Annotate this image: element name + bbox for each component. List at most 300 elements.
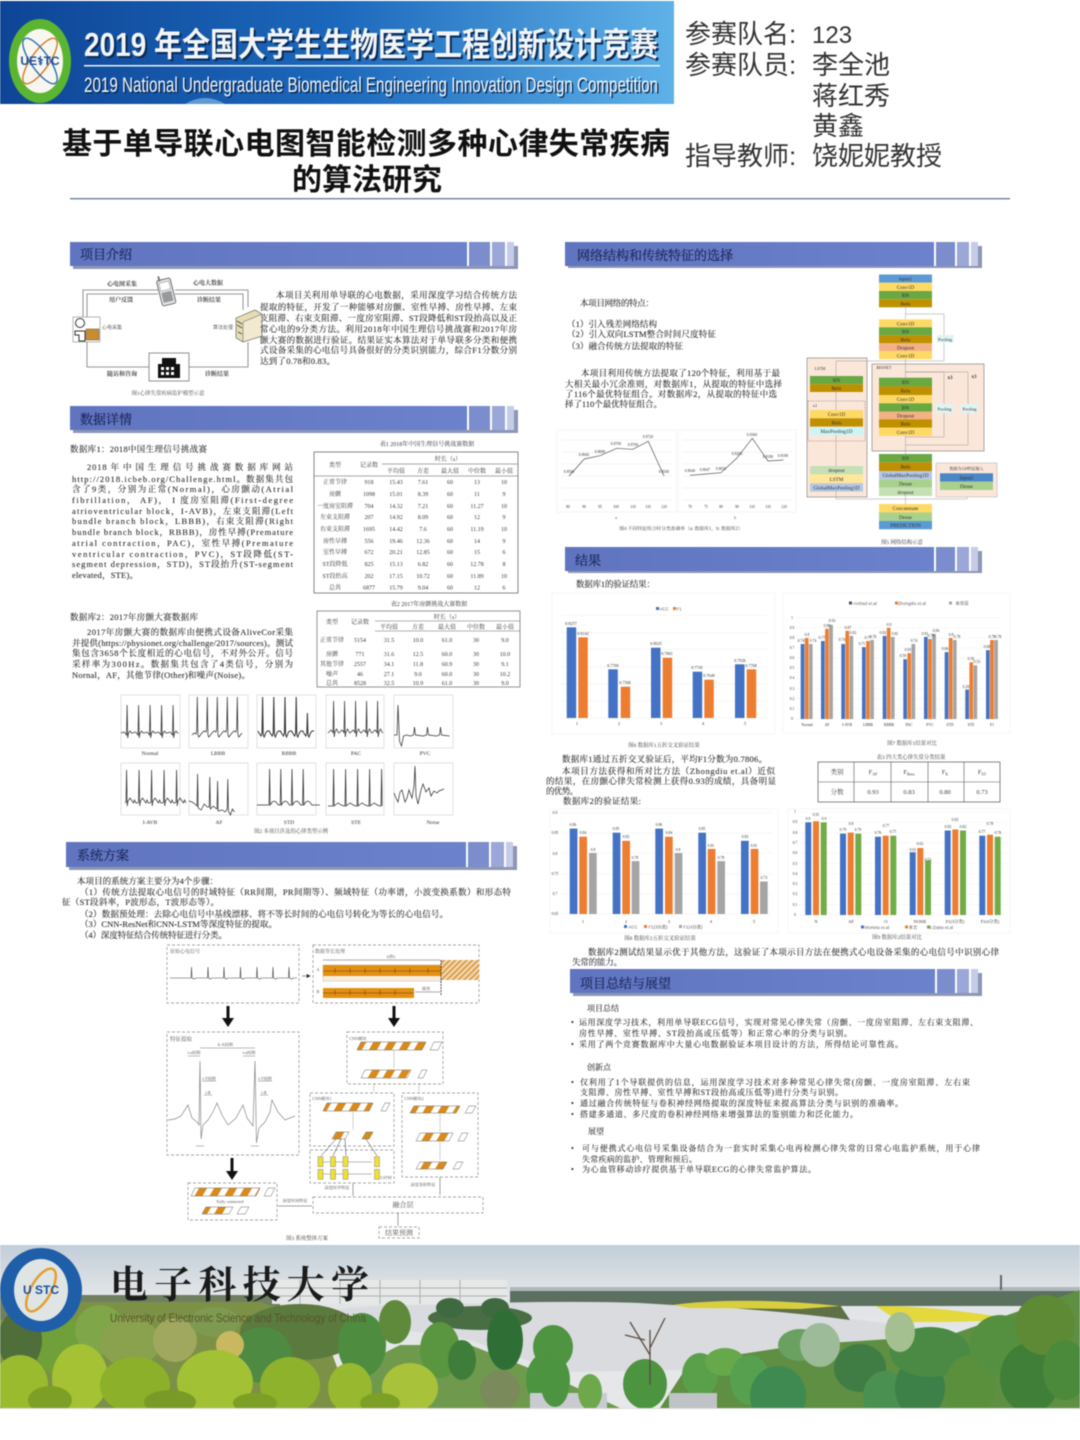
table 2: 31.6 xyxy=(384,652,394,658)
text block: scheme steps: （1）传统方法提取心电信号的时域特征（RR间期，PR间期等）、频域特征（功率谱，小波变换系数）和形态特 xyxy=(80,887,511,898)
text block: outlook: 失常疾病的监护、管理和预后。 xyxy=(582,1154,697,1164)
stack: output block: Dense xyxy=(899,515,913,521)
chart: five-fold validation database 2: ACC xyxy=(628,924,638,930)
stack: second block: Dropout xyxy=(897,346,915,352)
text block: database 1: http://2018.icbeb.org/Challenge.html。数据集共包 xyxy=(72,474,293,484)
chart: feature count accuracy a: 0.8700 xyxy=(628,443,638,447)
chart: five-fold validation database 2: 0.83 xyxy=(623,835,629,839)
text block: intro paragraph: 提取的特征，开发了一种能够对房颤、室性早搏、房性早搏、左束 xyxy=(260,302,517,313)
panel: second input: 数据为120特征输入 xyxy=(950,465,984,471)
chart: five-fold validation database 2: 0.78 xyxy=(632,856,638,860)
chart: ECG rhythm examples: PVC xyxy=(420,751,431,757)
text block: project summary xyxy=(571,1003,978,1050)
chart: five-fold validation database 2: 0.84 xyxy=(580,831,586,835)
text block: intro paragraph: 颤大赛的数据进行验证。结果证实本算法对于单导联多分类和便携 xyxy=(260,335,517,345)
table 3: 分数 xyxy=(830,787,844,796)
icon: patient with device xyxy=(73,317,100,342)
table 2: 方差 xyxy=(412,623,424,631)
step: raw ECG xyxy=(170,948,297,979)
stack: output block: GlobalMaxPooling1D xyxy=(882,473,929,479)
table 1: 14.42 xyxy=(389,527,403,533)
chart: comparison database 1: 1 xyxy=(791,616,793,620)
text block: innovation points: 仅利用了1个导联提供的信息，运用深度学习技术对多种常见心律失常(房颤、一度房室阻滞、左右束 xyxy=(580,1077,970,1088)
table 1: 6.82 xyxy=(418,562,428,568)
text block: database 2 results: 数据库2测试结果显示优于其他方法，这验证了本项示目方法在便携式心电设备采集的心电信号中识别心律 xyxy=(588,947,999,958)
chart: five-fold validation database 2: 1 xyxy=(582,919,584,924)
text block: database 1: ventricular contraction，PVC)，ST段降低(ST- xyxy=(72,549,293,560)
footer: campus photo banner xyxy=(0,1245,1080,1426)
table 1: 6 xyxy=(502,586,506,592)
text block: network features: （3）融合传统方法提取的特征 xyxy=(567,341,683,351)
chart: five-fold validation database 1 xyxy=(552,593,775,734)
table 1: 60 xyxy=(447,480,453,486)
step: fusion and prediction: 深度时间特征 xyxy=(282,1197,308,1204)
text block: database 2: 数据库2：2017年房颤大赛数据库 xyxy=(70,612,198,622)
table 1: 12.36 xyxy=(416,539,430,545)
chart: ECG rhythm examples: Noise xyxy=(427,820,440,826)
panel: LSTM branch: Relu xyxy=(832,386,842,392)
text block: database 1 results: 本项目方法获得和所对比方法（Zhongdiu et.al）近似 xyxy=(562,766,775,776)
step: CNN module 1: CNN模块1 xyxy=(312,1095,332,1102)
table 2: 10.0 xyxy=(500,652,510,658)
chart: five-fold validation database 2: 0.8 xyxy=(591,848,595,852)
chart: comparison database 1: 0.79 xyxy=(928,634,934,638)
chart: comparison database 2: 0.77 xyxy=(979,830,985,834)
text block: intro paragraph xyxy=(260,290,517,366)
chart: feature count accuracy a: 80 xyxy=(566,505,570,509)
diagram: ECG monitoring model: 诊断结果 xyxy=(197,296,221,304)
table 1: 12 xyxy=(474,586,480,592)
team info: 指导教师: xyxy=(685,141,796,171)
text block: database 2 results: 失常的能力。 xyxy=(572,957,622,967)
chart: comparison database 2: S.Datta et.al xyxy=(929,925,953,930)
table 2: 9.0 xyxy=(414,672,422,678)
chart: feature count accuracy b: 0.8040 xyxy=(685,469,695,473)
chart: comparison database 1: 0.65 xyxy=(905,648,911,652)
text block: database 1: atrial contraction，PAC)，室性早搏(Premature xyxy=(72,538,293,549)
panel: LSTM branch: Relu xyxy=(832,420,842,426)
table 2: 9.0 xyxy=(501,681,509,687)
chart: five-fold validation database 2: F1(3分类) xyxy=(648,924,668,930)
table 1: 60 xyxy=(447,574,453,580)
banner title Chinese: 2019 年全国大学生生物医学工程创新设计竞赛 xyxy=(86,28,660,65)
title: 基于单导联心电图智能检测多种心律失常疾病 xyxy=(62,119,670,163)
chart: feature count accuracy b: 90 xyxy=(735,505,739,509)
heading: 系统方案: 系统方案 xyxy=(77,848,129,863)
table 1: 60 xyxy=(447,527,453,533)
table 1: 14.92 xyxy=(389,515,403,521)
chart: comparison database 2: 0.83 xyxy=(952,818,958,822)
heading: 项目介绍 xyxy=(70,242,518,269)
diagram: network structure xyxy=(807,274,997,546)
panel: RESNET block: Relu xyxy=(901,388,911,394)
chart: comparison database 2: 0.78 xyxy=(987,822,993,826)
chart: five-fold validation database 1: 0.7768 xyxy=(745,663,757,668)
heading: 结果: 结果 xyxy=(575,553,601,568)
stack: second block: Pooling xyxy=(938,337,953,342)
step: feature extraction: t-a间期 xyxy=(243,1049,256,1056)
chart: comparison database 1: 0.7 xyxy=(790,646,794,650)
chart: comparison database 1: F1 xyxy=(990,723,994,727)
chart: feature count accuracy a: 120 xyxy=(661,505,667,509)
logo text: university name xyxy=(110,1264,368,1325)
text block: outlook: 展望 xyxy=(588,1126,604,1136)
chart: comparison database 2: 0.77 xyxy=(890,830,896,834)
chart: comparison database 1: 0.56 xyxy=(968,657,974,661)
text block: network features: （2）引入双向LSTM整合时间尺度特征 xyxy=(567,329,716,339)
table 2: 30 xyxy=(473,662,479,668)
chart: comparison database 2 xyxy=(788,809,1010,933)
panel: LSTM branch: x1 xyxy=(813,403,817,408)
chart: comparison database 1: 0.78 xyxy=(989,635,995,639)
table 2: 30 xyxy=(473,652,479,658)
chart: five-fold validation database 1: 5 xyxy=(744,721,747,726)
table 1: 方差 xyxy=(417,467,429,475)
chart: five-fold validation database 1: 2 xyxy=(618,721,620,726)
icon: UESTC logo: U STC xyxy=(23,1283,59,1297)
step: LSTM: LSTM xyxy=(380,1175,392,1180)
table 1: 室性早搏 xyxy=(323,548,347,556)
chart: feature count accuracy b xyxy=(678,430,796,512)
table 3: 0.83 xyxy=(903,789,915,796)
team info xyxy=(685,19,942,173)
panel: data details xyxy=(70,406,520,835)
panel: RESNET block: Dropout xyxy=(897,414,915,420)
team info: 蒋红秀 xyxy=(812,76,890,113)
table 2: 最小值 xyxy=(496,623,514,631)
stack: output block: BN xyxy=(902,456,909,462)
table 2: 32.5 xyxy=(384,681,394,687)
table 3: 表3 四大类心律失常分类结果 xyxy=(877,753,946,761)
chart: comparison database 1: 0.74 xyxy=(810,639,816,643)
chart: feature count accuracy b: 120 xyxy=(781,505,787,509)
table 2: 61.0 xyxy=(442,638,452,644)
table 2: 31.5 xyxy=(384,638,394,644)
table 2: 46 xyxy=(357,672,363,678)
text block: database 1: bundle branch block，RBBB)，房性早搏(Premature xyxy=(72,527,293,538)
step: CNN module xyxy=(349,1035,442,1092)
table 1: 15.79 xyxy=(389,586,403,592)
chart: five-fold validation database 2: 0.9 xyxy=(553,811,557,815)
text block: database 2: 并提供(https://physionet.org/challenge/2017/sources)。测试 xyxy=(72,638,293,648)
panel: RESNET block: Pooling xyxy=(937,406,952,412)
table 1: 9 xyxy=(502,539,506,545)
chart: comparison database 1: AF xyxy=(825,723,829,727)
text block: innovation points: 支阻滞、房性早搏、室性早搏和ST段抬高或压低等)进行分类与识别。 xyxy=(580,1087,843,1097)
arrow xyxy=(302,974,310,978)
text block: outlook: 为心血管移动诊疗提供基于单导联ECG的心律失常监护算法。 xyxy=(582,1164,816,1174)
step: fusion and prediction: 结果预测 xyxy=(385,1228,413,1237)
table 1: 10 xyxy=(501,527,507,533)
table 1: 825 xyxy=(364,562,374,568)
text block: intro paragraph: 式设备采集的心电信号具备很好的分类识别能力，综合F1分数分别 xyxy=(260,345,517,356)
heading: 项目介绍: 项目介绍 xyxy=(80,247,132,262)
chart: comparison database 2: 0.9 xyxy=(806,817,810,821)
chart: comparison database 2: AF xyxy=(848,919,854,924)
step: fusion and prediction: 融合层 xyxy=(392,1200,414,1209)
stack: output block xyxy=(879,454,932,529)
stack: input block: BN xyxy=(902,293,909,299)
chart: ECG rhythm examples: STD xyxy=(284,820,294,826)
table 2: 9.1 xyxy=(501,662,509,668)
table 2: 12.5 xyxy=(413,652,423,658)
stack: second block: Conv1D xyxy=(897,322,915,328)
caption: figure 4: a xyxy=(615,515,617,520)
panel: RESNET block: RESNET xyxy=(876,365,892,370)
chart: feature count accuracy a: 116 xyxy=(645,505,651,509)
title xyxy=(62,119,670,199)
heading: 项目总结与展望: 项目总结与展望 xyxy=(580,976,671,991)
chart: feature count accuracy a: 0.8500 xyxy=(659,470,669,474)
table 2: 5154 xyxy=(354,638,366,644)
chart: comparison database 2: F1(4分类) xyxy=(981,918,1000,925)
chart: comparison database 1 xyxy=(783,593,1010,733)
chart: five-fold validation database 1: 0.7801 xyxy=(661,651,673,656)
chart: comparison database 1: 0.77 xyxy=(819,636,825,640)
diagram: ECG monitoring model: 用户反馈 xyxy=(109,296,133,304)
step: length equalization: 填充 xyxy=(422,985,431,992)
table 2: 11.8 xyxy=(413,662,423,668)
chart: comparison database 2: 1 xyxy=(794,810,796,814)
stack: second block xyxy=(836,307,967,504)
text block: outlook: • xyxy=(571,1165,574,1174)
table 3: F xyxy=(903,769,907,776)
chart: comparison database 1: 0.82 xyxy=(850,631,856,635)
table 3: 0.80 xyxy=(939,789,951,796)
chart: comparison database 2: 0.3 xyxy=(793,882,797,886)
table 1: 10 xyxy=(501,480,507,486)
table 2: 其他节律 xyxy=(320,660,344,668)
chart: five-fold validation database 1: 0.7649 xyxy=(703,673,715,678)
table 2: 类型 xyxy=(326,618,338,626)
stack: input block: Relu xyxy=(901,302,911,308)
chart: comparison database 1: 0.78 xyxy=(954,635,960,639)
chart: comparison database 1: Zhongdiu et.al xyxy=(898,601,926,606)
table 2: 10.9 xyxy=(413,681,423,687)
text block: database 1 results: 的优势。 xyxy=(546,786,578,796)
chart: five-fold validation database 1: 3 xyxy=(660,721,663,726)
chart: comparison database 2: 0.2 xyxy=(793,892,797,896)
chart: comparison database 1: STE xyxy=(968,723,975,727)
table 2: 最大值 xyxy=(438,623,456,631)
chart: comparison database 1: 0.3 xyxy=(790,687,794,691)
table 1: 60 xyxy=(447,504,453,510)
text block: innovation points: 搭建多通道、多尺度的卷积神经网络来增强算法的鉴别能力和泛化能力。 xyxy=(580,1109,858,1119)
chart: comparison database 2: 本文 xyxy=(909,924,918,931)
chart: comparison database 2: 0.5 xyxy=(793,862,797,866)
panel: LSTM branch: GlobalMaxPooling1D xyxy=(813,486,860,492)
stack: second block: BN xyxy=(902,330,909,336)
table 1: ST段抬高 xyxy=(322,572,348,580)
table 1: 556 xyxy=(364,539,374,545)
chart: comparison database 2: 0.9 xyxy=(793,820,797,824)
step: length equalization: A xyxy=(316,967,320,972)
table 1: 平均值 xyxy=(387,467,405,475)
chart: ECG rhythm examples: AF xyxy=(215,820,223,826)
chart: comparison database 1: 0.81 xyxy=(892,632,898,636)
table 2: 噪声 xyxy=(326,670,338,678)
table 1: 类型 xyxy=(329,461,341,469)
chart: ECG rhythm examples: I-AVB xyxy=(143,820,158,826)
step: CNN module 1 xyxy=(312,1095,390,1139)
table 1: 207 xyxy=(364,515,374,521)
table 2: 时长（s） xyxy=(434,613,460,621)
chart: five-fold validation database 2: 0.81 xyxy=(751,844,757,848)
chart: feature count accuracy a: 0.8680 xyxy=(595,450,605,454)
table 1: 60 xyxy=(447,492,453,498)
text block: database 2 xyxy=(70,612,293,681)
panel: LSTM branch: Conv1D xyxy=(828,412,846,418)
chart: ECG rhythm examples xyxy=(121,695,453,835)
diagram: ECG monitoring model: 心电大数据 xyxy=(193,279,223,287)
table 1: 672 xyxy=(364,550,374,556)
chart: feature count accuracy b: 0.8047 xyxy=(700,468,710,472)
step: length equalization xyxy=(315,948,479,998)
flow diagram: overall scheme xyxy=(167,945,483,1242)
chart: comparison database 1: 0.2 xyxy=(790,697,794,701)
chart: five-fold validation database 2: 0.65 xyxy=(552,912,558,916)
table 2: 61.0 xyxy=(442,681,452,687)
table 1: 15.01 xyxy=(389,492,403,498)
chart: five-fold validation database 2: 0.75 xyxy=(552,872,558,876)
table 1: 10 xyxy=(501,574,507,580)
text block: project summary: 房性早搏、室性早搏、ST段抬高或压低等）和正常心率的分类与识别。 xyxy=(579,1028,852,1038)
table 1: 8 xyxy=(502,562,506,568)
chart: comparison database 1: PVC xyxy=(926,723,934,727)
table 2: 平均值 xyxy=(380,623,398,631)
table 1: 表1 2018年中国生理信号挑战赛数据 xyxy=(380,440,474,448)
stack: input block: Conv1D xyxy=(897,285,915,291)
chart: five-fold validation database 2: 0.8 xyxy=(553,852,557,856)
panel: second input: Dense xyxy=(960,484,974,490)
table 1: 60 xyxy=(447,550,453,556)
chart: comparison database 1: 0.78 xyxy=(995,635,1001,639)
chart: five-fold validation database 2: 0.85 xyxy=(552,831,558,835)
chart: five-fold validation database 2: 2 xyxy=(625,919,627,924)
panel: RESNET block: Relu xyxy=(901,422,911,428)
chart: comparison database 2: 0.61 xyxy=(910,848,916,852)
text block: database 1: 含了9类，分别为正常(Normal)，心房颤动(Atrial xyxy=(72,484,294,495)
table 3: F xyxy=(869,769,872,776)
chart: five-fold validation database 2: 0.78 xyxy=(718,856,724,860)
text block: database 2 results xyxy=(572,947,999,967)
chart: feature count accuracy a: 100 xyxy=(613,505,619,509)
chart: comparison database 2: 0.91 xyxy=(813,813,819,817)
table 1: 左束支阻滞 xyxy=(320,513,350,521)
table 1: 记录数 xyxy=(360,461,378,469)
stack: second block: Conv1D xyxy=(897,354,915,360)
step: LSTM xyxy=(318,1139,392,1180)
panel: results xyxy=(546,547,1010,967)
table 2 xyxy=(317,600,520,687)
chart: comparison database 2: NOISE xyxy=(914,919,927,924)
caption: figure 4 xyxy=(615,515,743,532)
text block: project summary: 项目总结 xyxy=(587,1003,619,1013)
chart: comparison database 1: 0.77 xyxy=(865,636,871,640)
chart: comparison database 1: 0.59 xyxy=(900,654,906,658)
table 1: 7.21 xyxy=(418,504,428,510)
step: fully connected: Fully connected xyxy=(217,1199,244,1204)
chart: ECG rhythm examples: STE xyxy=(351,820,362,826)
table 1: 9 xyxy=(502,492,506,498)
chart: comparison database 2: 0.76 xyxy=(875,831,881,835)
table 1: 918 xyxy=(364,480,374,486)
chart: five-fold validation database 2: 0.84 xyxy=(666,831,672,835)
team info: 饶妮妮教授 xyxy=(812,136,942,173)
table 1: 12.78 xyxy=(470,562,484,568)
table 1: 10.72 xyxy=(416,574,430,580)
chart: ECG rhythm examples: Normal xyxy=(142,751,159,757)
table 1: 10 xyxy=(501,504,507,510)
diagram: ECG monitoring model xyxy=(73,274,262,397)
logo text: university name: 电子科技大学 xyxy=(110,1254,369,1309)
text block: database 1 results: 数据库1通过五折交叉验证后，平均F1分数为0.7806。 xyxy=(562,754,767,765)
chart: comparison database 1: 0 xyxy=(791,717,793,721)
chart: comparison database 2: 0.4 xyxy=(793,872,797,876)
table 2: 中位数 xyxy=(467,623,485,631)
chart: comparison database 1: 0.4 xyxy=(790,676,794,680)
table 2: 30 xyxy=(473,681,479,687)
chart: comparison database 1: 0.1 xyxy=(790,707,794,711)
text block: scheme steps xyxy=(62,876,511,940)
step: feature extraction: 特征提取 xyxy=(170,1035,193,1043)
chart: comparison database 1: 0.5 xyxy=(790,666,794,670)
table 2: 34.1 xyxy=(384,662,394,668)
text block: innovation points xyxy=(571,1062,970,1119)
panel: network and features xyxy=(557,242,997,546)
chart: comparison database 1: PAC xyxy=(905,723,913,727)
chart: comparison database 1: LBBB xyxy=(863,723,873,727)
diagram: ECG monitoring model: 心电采集 xyxy=(102,324,122,331)
chart: feature count accuracy b: 116 xyxy=(765,505,771,509)
stack: output block: Relu xyxy=(901,464,911,470)
chart: feature count accuracy a: 0.8700 xyxy=(611,442,621,446)
panel: results: 图9 数据库2结果对比 xyxy=(872,933,923,941)
table 1: 12.85 xyxy=(416,550,430,556)
panel: RESNET block: BN xyxy=(902,380,909,386)
step: raw ECG: 原始心电信号 xyxy=(170,948,200,955)
chart: five-fold validation database 2: 0.83 xyxy=(742,835,748,839)
step: CNN module: CNN模块 xyxy=(349,1035,367,1042)
diagram: ECG monitoring model: 算法处理 xyxy=(213,324,233,331)
chart: comparison database 2: 0.1 xyxy=(793,903,797,907)
diagram: ECG monitoring model: 诊断结果 xyxy=(205,370,229,378)
panel: project intro xyxy=(70,242,518,397)
panel: LSTM branch xyxy=(807,358,867,497)
table 1: 9 xyxy=(502,515,506,521)
panel: LSTM branch: BN xyxy=(833,378,840,384)
table 2: 9.0 xyxy=(501,638,509,644)
step: length equalization: t(秒) xyxy=(387,953,396,960)
table 1: 房颤 xyxy=(329,490,342,498)
text block: database 1 results: 数据库2的验证结果: xyxy=(563,796,641,806)
chart: five-fold validation database 2: 0.85 xyxy=(613,827,619,831)
panel: RESNET block: x3 xyxy=(948,376,953,381)
table 2: 2557 xyxy=(354,662,366,668)
step: fusion and prediction: 图3 系统整体方案 xyxy=(286,1234,328,1242)
icon: competition logo xyxy=(9,19,71,103)
chart: comparison database 2: 0.79 xyxy=(855,828,861,832)
chart: comparison database 1: 0.81 xyxy=(922,632,928,636)
chart: feature count accuracy a: 110 xyxy=(630,505,636,509)
text block: database 2: 集包含3658个长度相近的心电信号，不对外公开。信号 xyxy=(72,648,293,659)
table 3: AF xyxy=(872,772,878,776)
table 2: 771 xyxy=(356,652,364,658)
team info: 参赛队名: xyxy=(685,19,796,49)
step: fusion and prediction xyxy=(278,1177,440,1242)
logo text: university name: University of Electronic Science and Technology of China xyxy=(110,1311,366,1325)
panel: RESNET block: Pooling xyxy=(962,406,977,412)
